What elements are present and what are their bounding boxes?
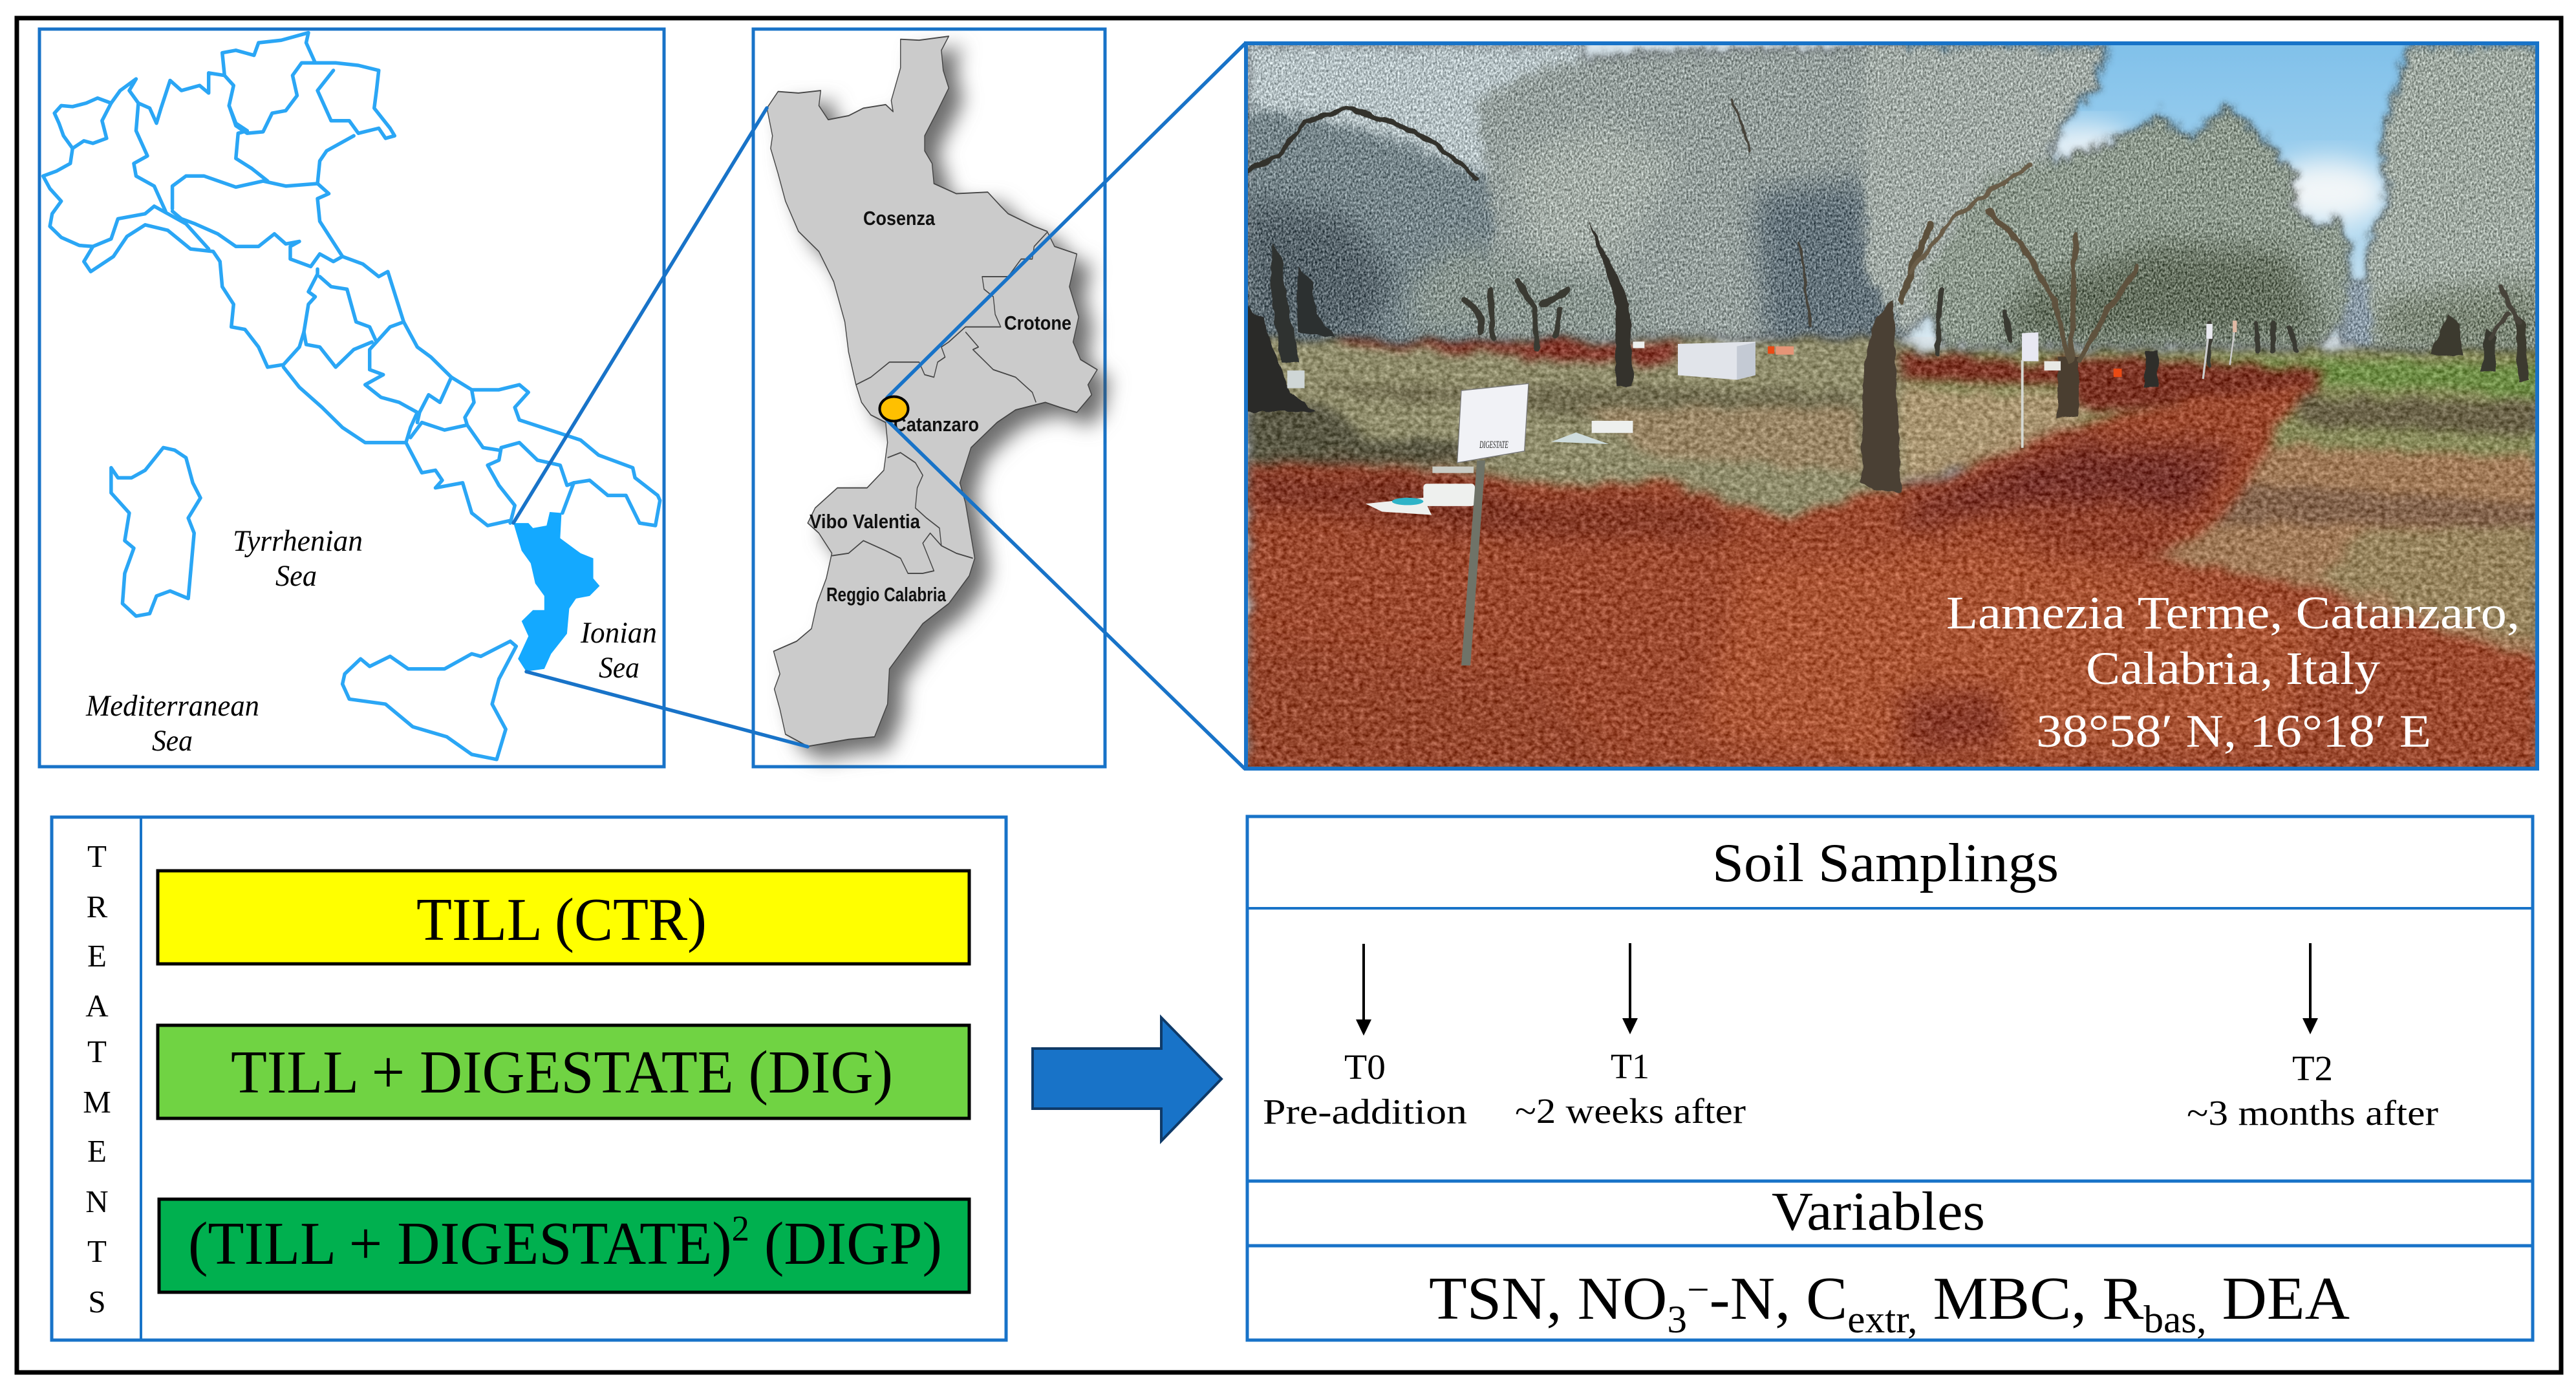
variable list: -N, C — [1710, 1265, 1847, 1332]
panel: treatments — [52, 817, 1006, 1340]
timepoint T0: T0 — [1344, 1047, 1386, 1087]
province labels: Cosenza — [863, 207, 936, 229]
olive trunks and branches — [1246, 100, 2529, 491]
variable list: DEA — [2206, 1265, 2350, 1332]
province labels: Catanzaro — [894, 413, 979, 436]
treatment box: (TILL + DIGESTATE)2 (DIGP) — [159, 1199, 969, 1292]
ground: grass and tilled soil — [1246, 337, 2541, 775]
timepoint T1 — [1515, 943, 1746, 1131]
label: Tyrrhenian Sea: Sea — [275, 559, 317, 593]
province labels: Crotone — [1004, 312, 1071, 334]
treatment box: (TILL + DIGESTATE)2 (DIGP): 2 — [732, 1209, 749, 1249]
timepoint T0: Pre-addition — [1263, 1092, 1467, 1131]
map: Italian regions outline — [43, 33, 660, 760]
sign: DIGESTATE: DIGESTATE — [1479, 440, 1508, 451]
timepoint T1: T1 — [1611, 1047, 1649, 1086]
vertical heading: TREATMENTS: R — [87, 889, 108, 924]
island: Sicily — [343, 641, 516, 760]
province labels — [810, 207, 1071, 606]
field equipment: flux chambers — [1287, 341, 1644, 515]
variable list: bas, — [2143, 1298, 2206, 1341]
island: Sardinia — [111, 447, 200, 616]
treatment box: (TILL + DIGESTATE)2 (DIGP): (TILL + DIGESTATE) — [188, 1210, 746, 1277]
timepoint T2: ~3 months after — [2187, 1093, 2438, 1133]
photo caption: Lamezia Terme, Catanzaro, — [1946, 587, 2520, 639]
sign post — [1461, 460, 1485, 665]
photo caption: Calabria, Italy — [2086, 643, 2380, 694]
panel: field site photograph — [1246, 39, 2541, 775]
variable list: 3 — [1667, 1298, 1687, 1341]
label: Ionian Sea: Ionian — [580, 616, 657, 650]
zoom lines linking the maps and the photograph — [513, 44, 1245, 769]
vertical heading: TREATMENTS: T — [87, 838, 107, 874]
olive tree canopies — [1246, 43, 2541, 365]
label: Mediterranean Sea: Sea — [152, 724, 193, 758]
variable list: − — [1687, 1268, 1710, 1311]
timepoint T2: T2 — [2292, 1049, 2333, 1088]
panel: soil samplings and variables — [1247, 816, 2533, 1341]
panel: map of Italy — [39, 29, 664, 767]
vertical heading: TREATMENTS: A — [85, 988, 109, 1023]
treatment box: TILL (CTR) — [158, 871, 969, 964]
region highlight: Calabria — [513, 512, 599, 672]
heading: Variables: Variables — [1772, 1181, 1985, 1242]
variable list: MBC, R — [1918, 1265, 2144, 1332]
treatment box: TILL + DIGESTATE (DIG): TILL + DIGESTATE (DIG) — [231, 1039, 893, 1106]
province labels: Vibo Valentia — [810, 510, 921, 533]
treatment box: TILL + DIGESTATE (DIG) — [158, 1025, 969, 1118]
treatment box: TILL (CTR): TILL (CTR) — [416, 886, 707, 954]
timepoint T1: ~2 weeks after — [1515, 1091, 1746, 1131]
arrow: treatments to samplings — [1033, 1018, 1221, 1141]
site marker: Lamezia Terme — [879, 397, 908, 421]
vertical heading: TREATMENTS: E — [87, 1133, 107, 1169]
label: Mediterranean Sea — [85, 689, 259, 758]
label: Ionian Sea — [580, 616, 657, 685]
province labels: Reggio Calabria — [826, 583, 947, 606]
map: Calabria provinces — [767, 36, 1097, 747]
timepoint T2 — [2187, 943, 2438, 1133]
label: Mediterranean Sea: Mediterranean — [85, 689, 259, 723]
variable list: extr, — [1847, 1298, 1918, 1341]
distant signs and markers — [1768, 321, 2237, 448]
vertical heading: TREATMENTS: E — [87, 938, 107, 974]
photo caption: 38°58′ N, 16°18′ E — [2036, 705, 2431, 757]
label: Ionian Sea: Sea — [599, 651, 639, 685]
treatment box: (TILL + DIGESTATE)2 (DIGP): (DIGP) — [749, 1210, 942, 1277]
heading: Soil Samplings: Soil Samplings — [1712, 833, 2059, 893]
panel: map of Calabria — [753, 29, 1105, 767]
label: Tyrrhenian Sea — [233, 524, 363, 593]
vertical heading: TREATMENTS: T — [87, 1233, 107, 1269]
vertical heading: TREATMENTS: T — [87, 1034, 107, 1069]
vertical heading: TREATMENTS: N — [85, 1184, 109, 1219]
vertical heading: TREATMENTS: M — [83, 1084, 111, 1120]
timepoint T0 — [1263, 944, 1467, 1131]
sky — [1906, 45, 2535, 325]
field equipment: white box — [1678, 341, 1755, 380]
variable list: TSN, NO — [1429, 1265, 1662, 1332]
photo caption — [1946, 587, 2520, 757]
sign: DIGESTATE — [1457, 383, 1529, 463]
vertical heading: TREATMENTS — [83, 838, 111, 1319]
vertical heading: TREATMENTS: S — [88, 1284, 106, 1319]
label: Tyrrhenian Sea: Tyrrhenian — [233, 524, 363, 558]
